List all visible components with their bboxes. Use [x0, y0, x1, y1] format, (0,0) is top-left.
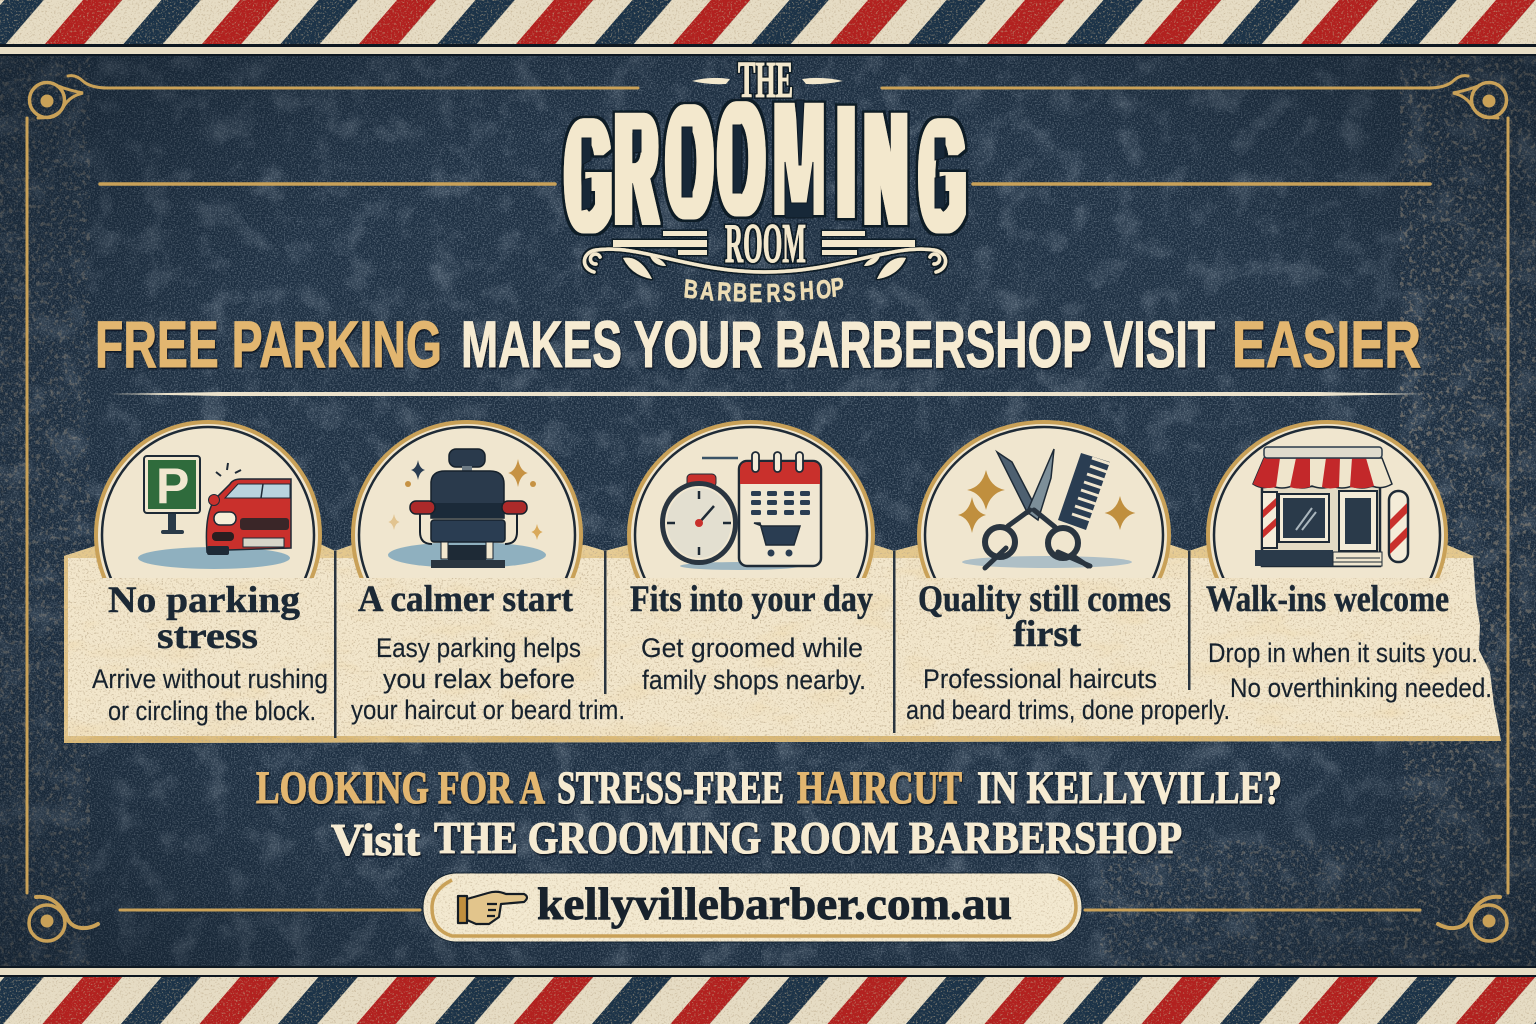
- icon: parking sign and red car: P: [156, 458, 189, 514]
- card dividers: [334, 551, 1190, 738]
- arch medallion: [94, 420, 322, 578]
- panel: quality still comes first: [906, 422, 1230, 725]
- logo word: GROOMING: GROOMING: [566, 70, 965, 266]
- card heading: Walk-ins welcome: [1206, 579, 1449, 620]
- call to action question: LOOKING FOR A: [256, 762, 545, 814]
- card text: Professional haircuts: [923, 664, 1157, 694]
- card text: and beard trims, done properly.: [906, 695, 1230, 725]
- card heading: [108, 580, 301, 657]
- logo side bars beside THE: [692, 78, 843, 84]
- headline: FREE PARKING: [95, 307, 442, 381]
- panel: no parking stress: [92, 422, 328, 726]
- top barber stripe band: [0, 0, 1536, 56]
- panel: a calmer start: [351, 422, 625, 725]
- card text: Arrive without rushing: [92, 664, 328, 694]
- logo: The Grooming Room Barbershop: [566, 52, 965, 308]
- card text: [1208, 638, 1492, 703]
- logo word: BARBERSHOP: BARBERSHOP: [683, 271, 845, 308]
- card text: Easy parking helps: [376, 633, 581, 663]
- icon: stopwatch and calendar: [660, 452, 821, 570]
- headline divider: [110, 392, 1425, 396]
- call to action question: [256, 762, 1282, 814]
- logo letter counters: [582, 100, 945, 218]
- icon: scissors and comb: [958, 449, 1135, 568]
- card text: No overthinking needed.: [1230, 673, 1492, 703]
- headline: [95, 307, 1421, 381]
- icon: barber chair: [388, 449, 546, 568]
- card text: [906, 664, 1230, 725]
- bottom barber stripe band: [0, 966, 1536, 1024]
- card text: [351, 633, 625, 725]
- card heading: A calmer start: [358, 579, 574, 620]
- website pill: [423, 873, 1082, 942]
- card heading: [918, 579, 1171, 655]
- panel: fits into your day: [629, 422, 873, 695]
- visit line: THE GROOMING ROOM BARBERSHOP: [434, 812, 1182, 863]
- logo flourish: [584, 231, 946, 279]
- panel: cream card strip: [60, 540, 1505, 746]
- logo: The Grooming Room Barbershop: ROOM: [725, 213, 806, 275]
- headline: EASIER: [1232, 307, 1421, 381]
- card heading: stress: [157, 616, 258, 657]
- card text: [641, 633, 866, 695]
- arch medallion: [917, 420, 1171, 578]
- card text: Get groomed while: [641, 633, 863, 663]
- card heading: Fits into your day: [630, 579, 873, 620]
- card text: or circling the block.: [108, 696, 316, 726]
- website address: kellyvillebarber.com.au: [537, 878, 1012, 929]
- card heading: No parking: [108, 580, 301, 621]
- card heading: first: [1013, 614, 1082, 655]
- card text: you relax before: [383, 664, 575, 694]
- icon: pointing hand: [458, 892, 527, 924]
- call to action question: HAIRCUT: [797, 762, 962, 814]
- card text: Drop in when it suits you.: [1208, 638, 1478, 668]
- visit line: Visit: [331, 814, 421, 865]
- panel: walk-ins welcome: [1206, 422, 1492, 703]
- call to action question: IN KELLYVILLE?: [977, 762, 1282, 814]
- icon: parking sign and red car: [138, 456, 291, 569]
- arch medallion: [351, 420, 583, 578]
- card text: your haircut or beard trim.: [351, 695, 625, 725]
- logo word: THE: THE: [738, 52, 793, 109]
- card text: family shops nearby.: [642, 665, 866, 695]
- card heading: Quality still comes: [918, 579, 1171, 620]
- arch medallion: [627, 420, 875, 578]
- card text: [92, 664, 328, 726]
- arch medallion: [1206, 420, 1448, 578]
- icon: barbershop storefront: [1253, 447, 1408, 566]
- call to action question: STRESS-FREE: [557, 762, 784, 814]
